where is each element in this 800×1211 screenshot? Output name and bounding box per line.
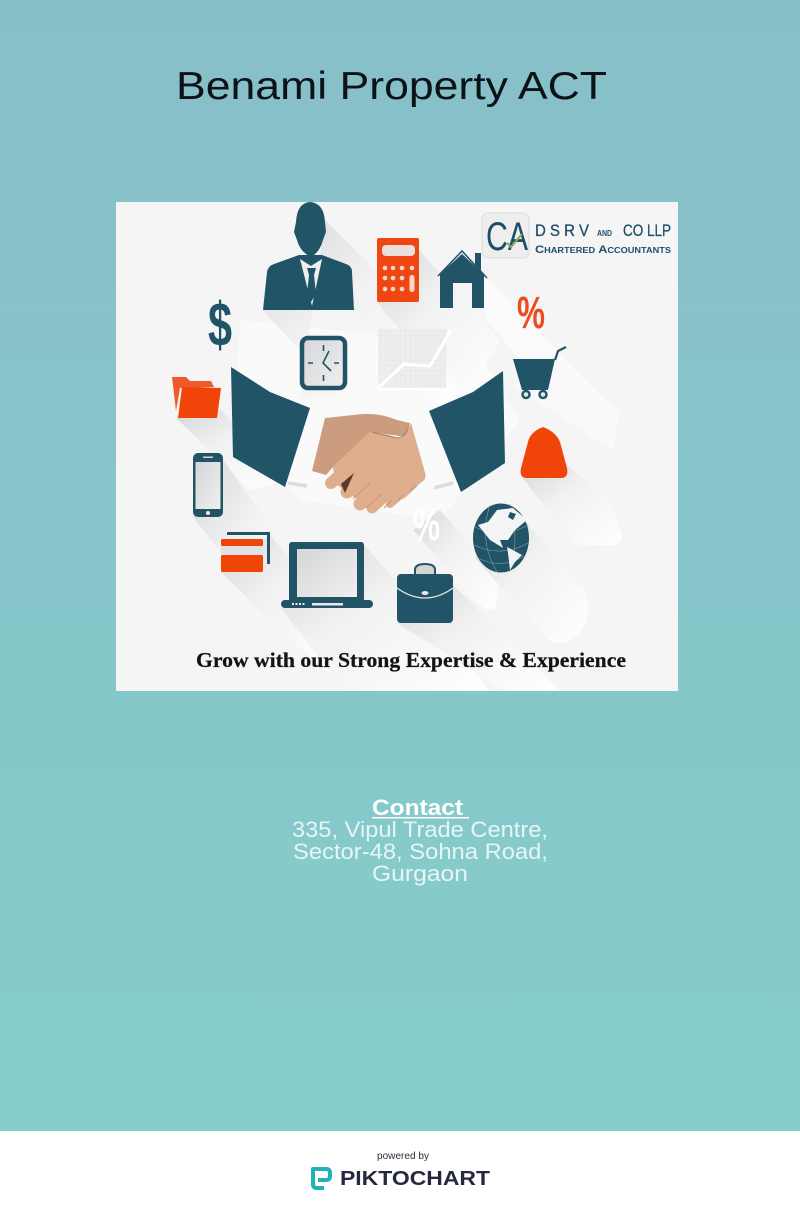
icon: calculator bbox=[377, 238, 419, 302]
firm name suffix: CO LLP bbox=[623, 221, 671, 240]
company logo bbox=[482, 213, 672, 259]
icon: percent orange: % bbox=[517, 287, 545, 338]
logo tick bbox=[507, 234, 522, 247]
address line 1: 335, Vipul Trade Centre, bbox=[292, 817, 548, 842]
icon: briefcase bbox=[397, 564, 453, 623]
handshake bbox=[312, 414, 426, 508]
icon: businessman bbox=[263, 202, 354, 310]
title: Benami Property ACT bbox=[176, 65, 607, 108]
address line 3: Gurgaon bbox=[372, 861, 468, 886]
logo badge bbox=[482, 213, 529, 258]
panel background bbox=[116, 202, 678, 691]
icon: percent white: % bbox=[413, 499, 440, 550]
icon: house bbox=[438, 251, 487, 308]
left sleeve and cuff bbox=[231, 367, 326, 487]
right sleeve and cuff bbox=[412, 371, 505, 492]
address line 2: Sector-48, Sohna Road, bbox=[293, 839, 548, 864]
icon: line chart bbox=[378, 329, 451, 389]
piktochart wordmark: PIKTOCHART bbox=[340, 1168, 490, 1190]
icon: globe bbox=[473, 504, 529, 572]
icon: laptop bbox=[281, 542, 373, 608]
footer bbox=[0, 1131, 800, 1211]
icon: credit cards bbox=[221, 534, 268, 572]
icon: dollar: $ bbox=[208, 291, 232, 360]
illustration panel: handshake and business icons bbox=[116, 202, 678, 691]
icon: clock bbox=[302, 338, 345, 388]
logo monogram: CA bbox=[486, 215, 528, 259]
firm name: D S R V bbox=[535, 221, 590, 240]
powered by label: powered by bbox=[377, 1150, 430, 1162]
contact heading: Contact bbox=[372, 795, 464, 820]
footer background bbox=[0, 1131, 800, 1211]
firm name and: AND bbox=[597, 229, 612, 238]
long shadows bbox=[176, 220, 622, 691]
icon: smartphone bbox=[193, 453, 223, 517]
icon: shopping cart bbox=[513, 347, 566, 398]
icon: folder bbox=[172, 377, 221, 418]
icon: piktochart logo bbox=[313, 1169, 330, 1188]
contact block bbox=[292, 795, 548, 886]
image slogan: Grow with our Strong Expertise & Experience bbox=[196, 648, 626, 672]
contact underline bbox=[372, 817, 469, 818]
firm tagline: Chartered Accountants bbox=[535, 244, 672, 256]
icon: purse bbox=[521, 427, 567, 478]
